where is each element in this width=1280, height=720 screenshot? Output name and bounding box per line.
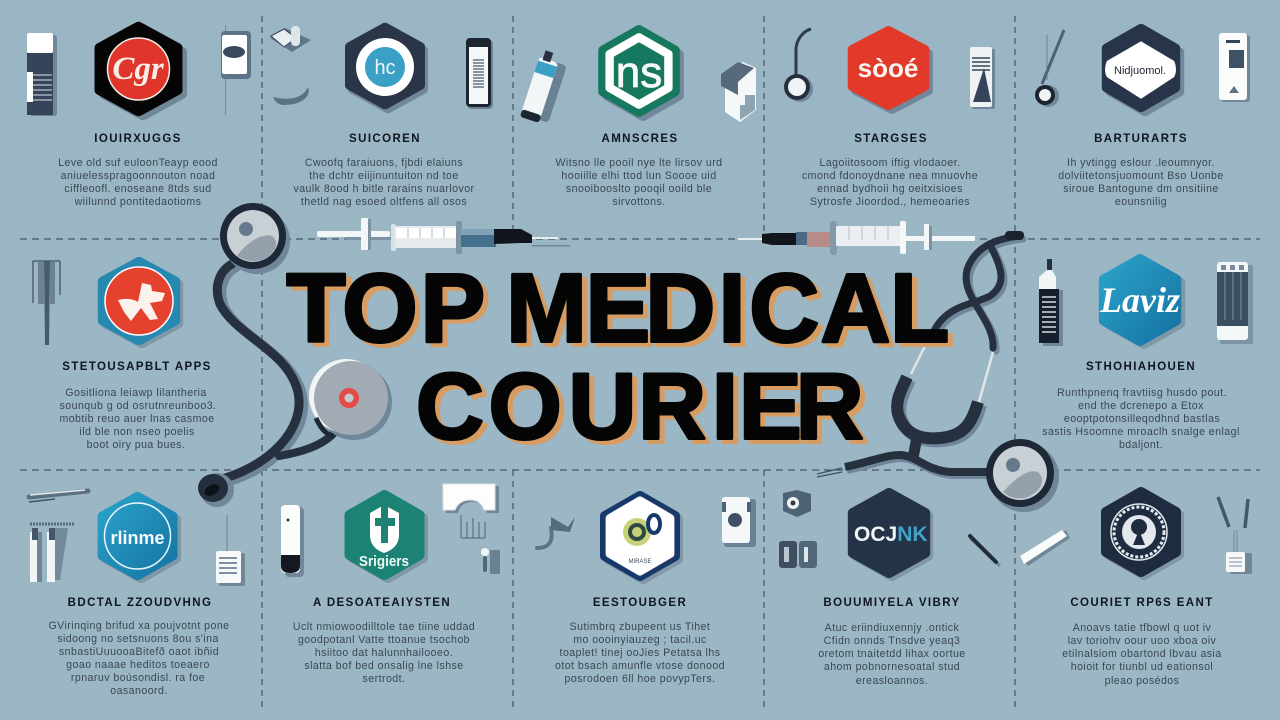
icon: goggles [443, 484, 499, 513]
body text: Leve old suf euloonTeayp eood [58, 157, 218, 169]
body text: snooibooslto pooqil ooild ble [566, 183, 712, 195]
body text: ennad bydhoii hg oeitxisioes [817, 183, 963, 195]
icon: box [721, 62, 756, 122]
tube [215, 264, 335, 484]
icon: probe [1035, 30, 1064, 107]
body text: lav toriohv oour uoo xboa oiv [1068, 635, 1217, 647]
body text: Uclt nmiowoodilltole tae tiine uddad [293, 621, 475, 633]
heading: SUICOREN [349, 133, 421, 145]
body text [818, 622, 966, 687]
right stethoscope [817, 231, 1059, 512]
heading: STETOUSAPBLT APPS [62, 361, 212, 373]
body text: wiilunnd pontitedaotioms [74, 196, 201, 208]
logo hexagon: ns [603, 30, 679, 116]
heading: IOUIRXUGGS [94, 133, 182, 145]
syringe right [738, 221, 975, 255]
icon: hook [537, 517, 575, 548]
left stethoscope [198, 203, 392, 507]
body text: Runthpnenq fravtiisg husdo pout. [1057, 387, 1227, 399]
body text: ild ble non nseo poelis [79, 426, 195, 438]
logo hexagon: hc: hc [374, 57, 396, 79]
body text: toaplet! tinej ooJies Petatsa lhs [560, 647, 720, 659]
logo hexagon: round seal [1106, 492, 1179, 575]
logo hexagon: red Cgr: Cgr [112, 51, 165, 87]
logo hexagon: red [853, 31, 928, 109]
body text [1062, 622, 1222, 687]
body text [802, 157, 978, 208]
barrel [391, 221, 462, 254]
body text: goao naaae heditos toeaero [66, 659, 210, 671]
body text: sertrodt. [363, 673, 405, 685]
panel: bottom row 5 [1020, 492, 1252, 687]
body text: Atuc eriindiuxennjy .ontick [825, 622, 960, 634]
body text: sounqub g od osrutnreunboo3. [60, 400, 216, 412]
logo hexagon: teal Srigiers [350, 495, 423, 578]
tubes [932, 236, 1023, 351]
needle [532, 237, 570, 246]
icon: camera [783, 490, 811, 517]
body text: Sutimbrq zbupeent us Tihet [570, 621, 710, 633]
logo hexagon: white badge: MIRASE [628, 559, 652, 565]
heading: BDCTAL ZZOUDVHNG [68, 597, 212, 609]
body text: slatta bof bed onsalig lne lshse [304, 660, 464, 672]
heading: COURIET RP6S EANT [1070, 597, 1214, 609]
panel: middle left [33, 261, 216, 451]
panel: top row 4 [784, 29, 995, 208]
liquid [796, 232, 830, 247]
metal ear tubes [911, 340, 993, 402]
body text: siroue Bantogune dm onsitiine [1063, 183, 1219, 195]
icon: tag on a string [216, 515, 245, 586]
title [286, 254, 954, 462]
chest piece drum [309, 359, 392, 440]
logo hexagon: red fan [103, 262, 178, 343]
panel: top row 1 [27, 25, 251, 208]
heading: AMNSCRES [601, 133, 679, 145]
ear tip [198, 473, 234, 507]
logo hexagon: hc [350, 28, 423, 108]
body text: Cfidn onnds Tnsdve yeaq3 [824, 635, 960, 647]
earpiece [1005, 231, 1024, 240]
chest piece [986, 439, 1059, 512]
icon: bottle [520, 49, 569, 126]
body text: otot bsach amunfle vtose donood [555, 660, 725, 672]
body text: cmond fdonoydnane nea mnuovhe [802, 170, 978, 182]
heading: EESTOUBGER [593, 597, 687, 609]
yoke [897, 377, 981, 458]
panel: bottom row 3 [537, 496, 756, 685]
heading: A DESOATEAIYSTEN [313, 597, 451, 609]
body text: hoioit for tiunbl ud eationsol [1071, 661, 1213, 673]
body text: eounsnilig [1115, 196, 1167, 208]
body text: sirvottons. [612, 196, 666, 208]
body text: Anoavs tatie tfbowl q uot iv [1073, 622, 1212, 634]
title shadow: TOP MEDICAL [291, 258, 954, 366]
body text: sidoong no setsnuons 8ou s'ina [57, 633, 219, 645]
body text: oasanoord. [110, 685, 168, 697]
icon: antennas with tag [1218, 497, 1252, 574]
body text: the dchtr eiijinuntuiton nd toe [309, 170, 459, 182]
body text: eooptpotonsilleqodhnd bastlas [1064, 413, 1220, 425]
heading: BOUUMIYELA VIBRY [823, 597, 961, 609]
logo hexagon: blue script: Laviz [1099, 280, 1180, 320]
body text: mo oooinyiauzeg ; tacil.uc [573, 634, 707, 646]
panel: top row 3 [520, 30, 756, 208]
body text: dolviitetonsjuomount Bso Uonbe [1058, 170, 1224, 182]
body text: Lagoiitosoom iftig vlodaoer. [820, 157, 960, 169]
logo hexagon: blue script [1099, 259, 1180, 344]
panel: top row 2 [270, 26, 493, 208]
icon: comb [461, 515, 485, 538]
logo hexagon: red: sòoé [858, 53, 918, 83]
plunger [905, 224, 975, 250]
title text: COURIER [416, 354, 864, 458]
title shadow [291, 258, 954, 462]
logo hexagon: white badge [605, 496, 678, 579]
icon: phone [466, 38, 493, 109]
icon: small stethoscope [784, 29, 813, 102]
body text: mobtib reuo auer lnas casmoe [59, 413, 215, 425]
logo hexagon: ns: ns [616, 48, 662, 97]
chest piece top [220, 203, 290, 274]
icon: pen [970, 536, 1000, 566]
icon: right car device [221, 25, 251, 115]
body text: etilnalsiom obartond lbvau asia [1062, 648, 1222, 660]
icon: fork instrument [33, 261, 60, 345]
body text: Cwoofq faraiuons, fjbdi elaiuns [305, 157, 463, 169]
heading: BARTURARTS [1094, 133, 1188, 145]
lower tube [817, 455, 994, 477]
body text: ahom pobnornesoatal stud [824, 661, 960, 673]
body text: ciffleoofl. enoseane 8tds sud [64, 183, 212, 195]
body text: sastis Hsoomne mroaclh snalge enlagl [1042, 426, 1240, 438]
panel: bottom row 1 [29, 490, 245, 697]
liquid and hub [461, 229, 532, 247]
icon: document [970, 47, 995, 109]
body text [555, 621, 725, 685]
panel: top row 5 [1035, 29, 1250, 208]
heading: STARGSES [854, 133, 928, 145]
body text: snbastiUuuooaBitefð oaot ibñid [59, 646, 219, 658]
body text: hooiille elhi ttod lun Soooe uid [561, 170, 717, 182]
body text: Gositliona leiawp lilantheria [65, 387, 207, 399]
body text: oretom tnaitetdd lihax oortue [818, 648, 966, 660]
body text [58, 157, 218, 208]
body text: boot oiry pua bues. [87, 439, 185, 451]
body text: Witsno lle pooil nye lte lirsov urd [555, 157, 723, 169]
title text: TOP MEDICAL [286, 254, 949, 362]
body text [48, 620, 230, 697]
icon: tube bars [30, 524, 74, 582]
icon: dropper [481, 548, 500, 574]
body text [59, 387, 216, 451]
logo hexagon: OCJNK: OCJNK [854, 523, 928, 546]
body text: goodpotanl Vatte ttoanue tsochob [298, 634, 470, 646]
logo hexagon: white emblem [1106, 29, 1179, 111]
body text [1042, 387, 1240, 451]
needle [738, 238, 762, 240]
body text: Sytrosfe Jioordod., hemeoaries [810, 196, 970, 208]
body text [555, 157, 723, 208]
body text: vaulk 8ood h bitle rarains nuarlovor [293, 183, 475, 195]
title text [286, 254, 949, 458]
body text [293, 157, 475, 208]
plunger [317, 218, 395, 250]
logo hexagon: white emblem: Nidjuomol. [1114, 65, 1166, 77]
logo hexagon: red Cgr [100, 27, 182, 115]
body text [293, 621, 475, 685]
icon: control unit [1217, 262, 1253, 344]
logo hexagon: blue rlinme [102, 497, 176, 578]
panel: middle right [1039, 259, 1253, 451]
body text: posrodoen 6ll hoe povypTers. [564, 673, 716, 685]
heading: STHOHIAHOUEN [1086, 361, 1196, 373]
body text: bdaljont. [1119, 439, 1163, 451]
logo hexagon: blue rlinme: rlinme [110, 528, 165, 548]
hub [762, 233, 796, 245]
icon: swoosh [273, 87, 309, 105]
icon: two vials [779, 541, 817, 568]
icon: white tube diagonal [1020, 530, 1070, 566]
title shadow: COURIER [421, 358, 869, 462]
barrel [830, 221, 906, 255]
icon: thin stick [29, 490, 88, 502]
panel: bottom row 2 [281, 484, 500, 685]
icon: pen device [1039, 259, 1063, 346]
logo hexagon: teal Srigiers: Srigiers [359, 554, 409, 570]
body text: hsiitoo dat halunnhailooeo. [315, 647, 453, 659]
icon: white tube [281, 505, 304, 577]
icon: pills [270, 26, 311, 52]
body text: end the dcrenepo a Etox [1078, 400, 1204, 412]
body text: rpnaruv boúsondisl. ra foe [71, 672, 205, 684]
icon: device module [722, 497, 756, 547]
body text: Ih yvtingg eslour .leoumnyor. [1067, 157, 1215, 169]
body text: GVirinqing brifud xa poujvotnt pone [48, 620, 230, 632]
body text: thetld nag esoed oltfens all osos [301, 196, 467, 208]
body text: ereasloannos. [856, 675, 928, 687]
body text: aniuelesspragoonnouton noad [61, 170, 215, 182]
logo hexagon: OCJNK [853, 493, 928, 576]
body text: pleao posédos [1105, 675, 1179, 687]
body text [1058, 157, 1224, 208]
icon: white device [1219, 33, 1250, 102]
syringe left [317, 218, 570, 254]
icon: left device [27, 33, 57, 116]
panel: bottom row 4 [779, 490, 1000, 687]
